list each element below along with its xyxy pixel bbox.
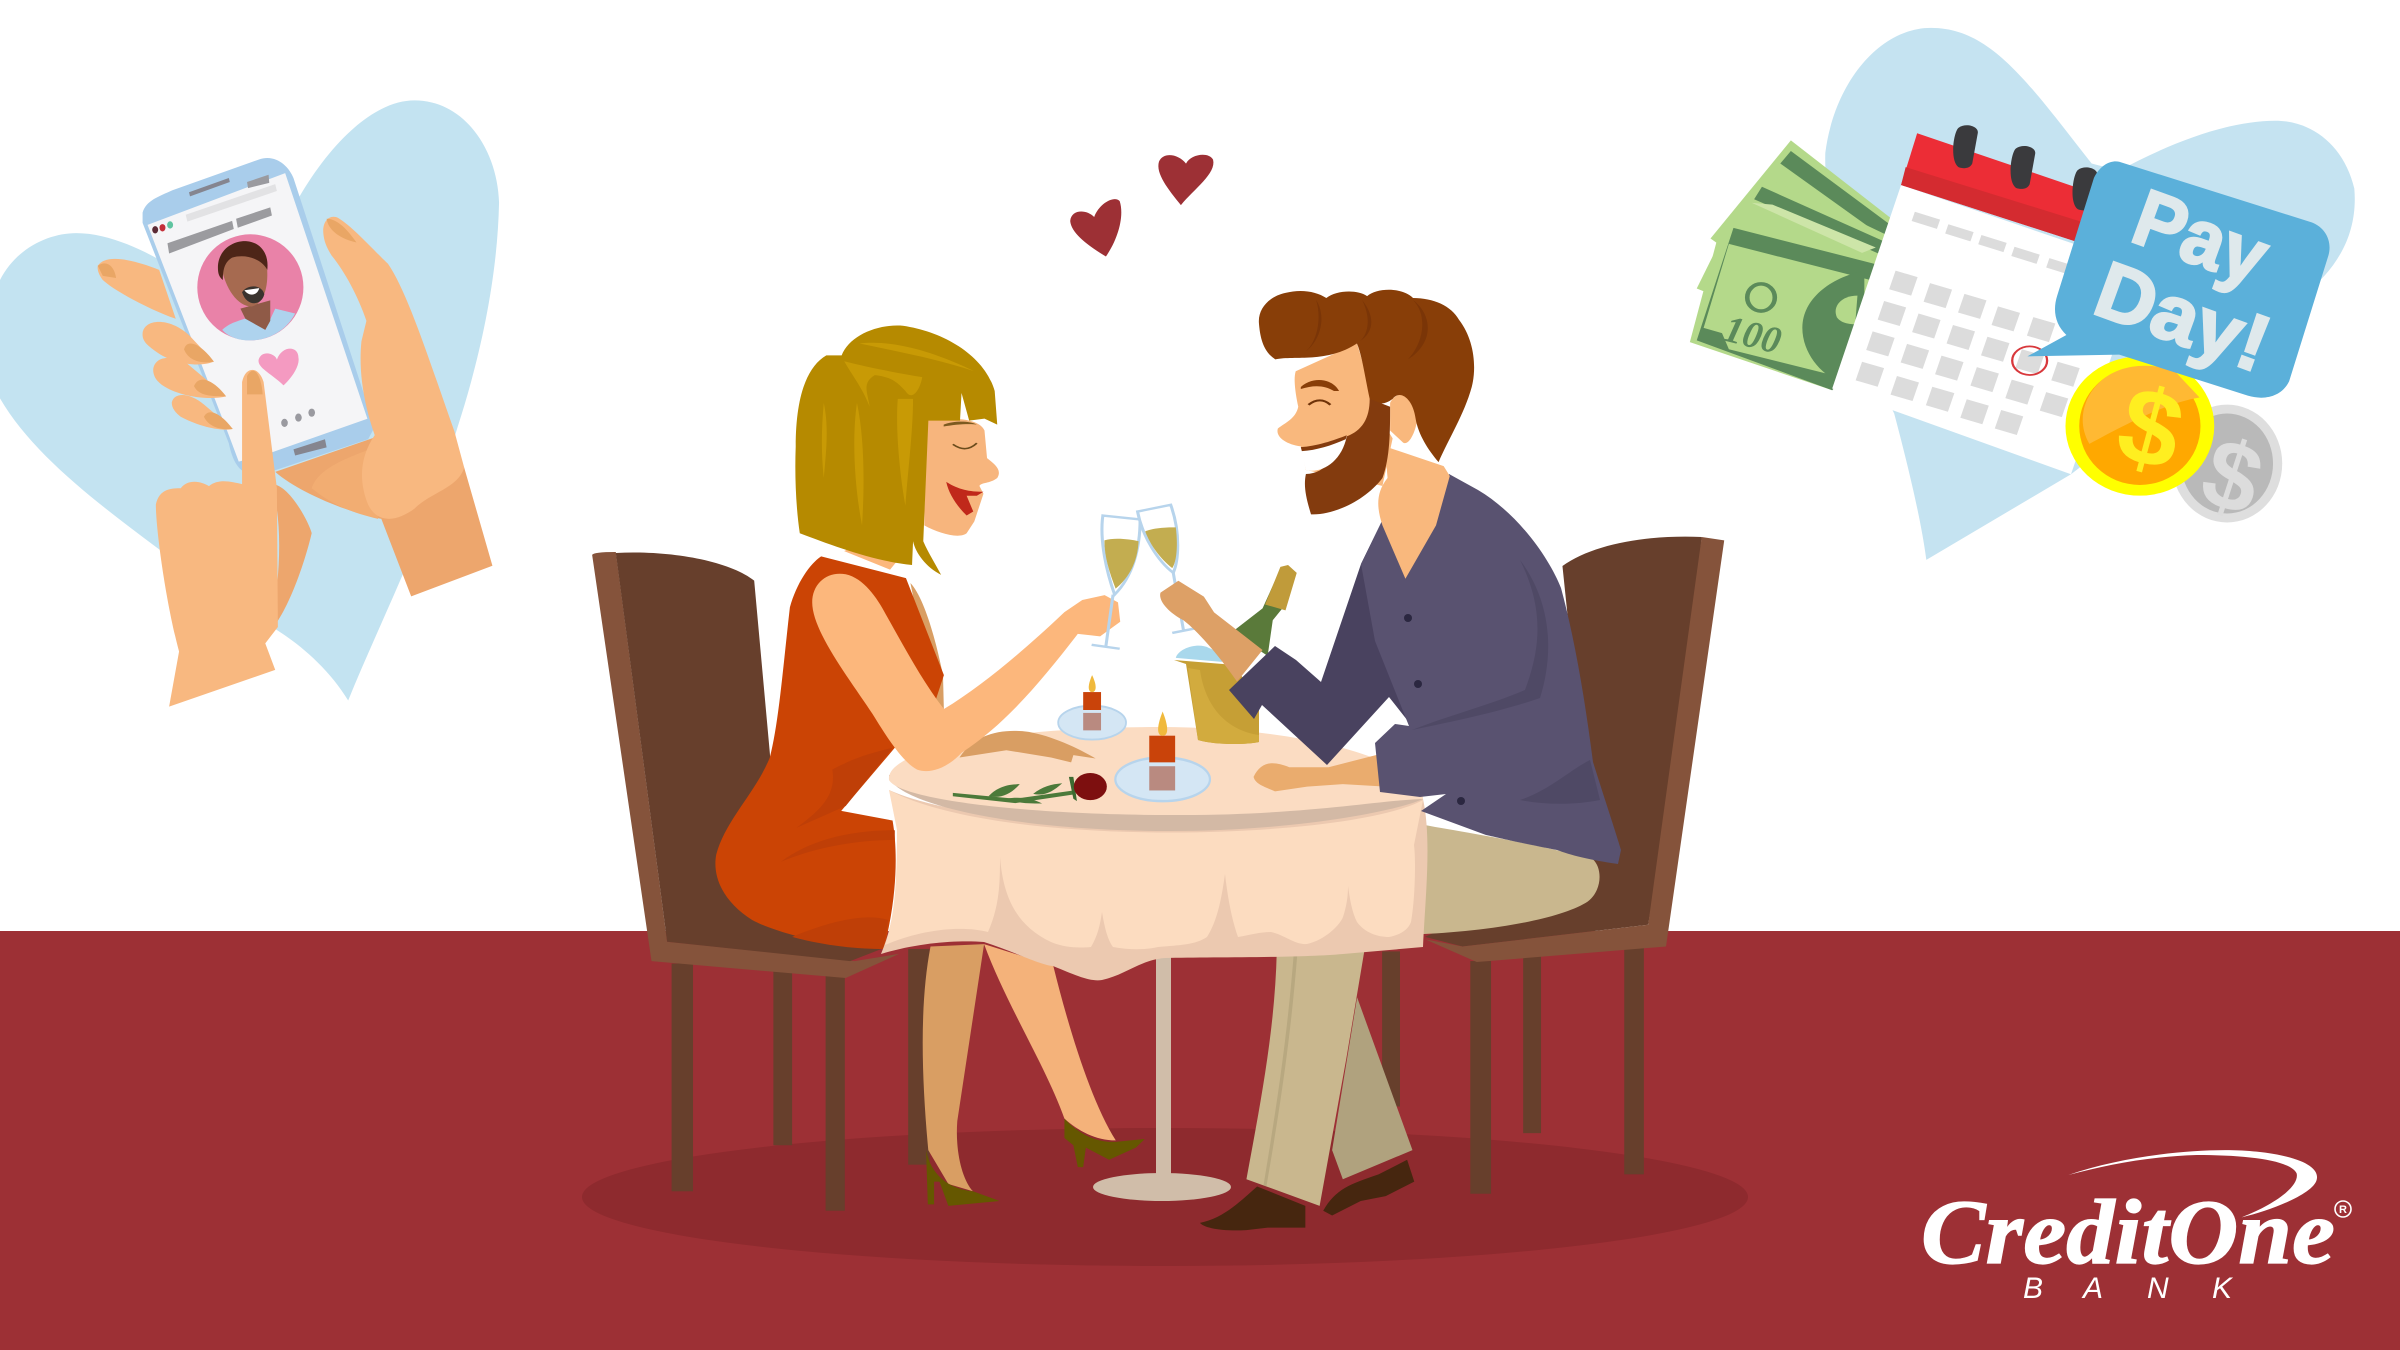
holding hand thumb [323,217,464,519]
front leg and heel [984,944,1145,1167]
left flute [1092,516,1140,649]
rose [953,773,1107,804]
front shoe [1200,1186,1305,1230]
champagne flutes [1092,505,1196,649]
right chair [1382,537,1724,1194]
champagne bottle and bucket [1174,565,1297,744]
neck [844,541,913,570]
woman head [795,326,999,575]
front candle [1115,711,1210,801]
blue heart behind calendar [1825,28,2355,560]
hearts above couple [1070,155,1213,257]
table items and woman arms [812,574,1210,804]
eye [1308,400,1330,405]
face [1277,344,1393,486]
orange dress [715,556,944,949]
shirt folds [1412,560,1600,804]
woman raised arm [812,574,1120,771]
face [924,419,999,536]
panel: phone dating app illustration [0,100,499,707]
man head [1259,290,1474,579]
gold coin [2065,356,2214,496]
thigh [1414,823,1600,934]
coin dollar signs [2106,361,2275,537]
face details [944,422,983,516]
index finger behind phone [98,259,176,319]
red floor [0,931,2400,1350]
woman resting arm [960,731,1096,762]
tablecloth [881,727,1427,980]
neck [1378,446,1450,579]
right flute [1138,505,1196,633]
back candle [1058,675,1126,740]
man hand on table [1254,753,1386,791]
table rim [889,770,1423,831]
man shirt and arms [1160,474,1621,864]
logo swoosh [2068,1150,2317,1217]
back leg [1332,997,1412,1179]
table stem and base [1093,950,1231,1201]
silver coin [2172,405,2282,522]
table top [889,727,1423,815]
logo wordmark: CreditOne [1921,1181,2335,1283]
logo registered mark [2335,1201,2351,1217]
speech bubble [2027,161,2330,398]
chest skin [910,583,944,711]
man lower body [1200,823,1600,1230]
floor shadow [582,1128,1748,1266]
bucket [1174,660,1259,744]
woman lower body [715,556,1145,1206]
stack of dollar bills [1690,140,1894,390]
moustache [1301,435,1347,451]
panel: payday illustration [1690,28,2355,560]
text: bill value 100: 100 [1720,308,1785,363]
man raised forearm [1160,581,1263,682]
coin dollar signs: $ [2106,361,2195,494]
shirt body [1361,474,1621,864]
text: Pay Day!: Day! [2084,244,2282,389]
blue heart behind phone [0,100,499,700]
smartphone [143,158,375,474]
text: Pay Day!: Pay [2122,172,2280,302]
logo registered mark: R [2339,1204,2347,1216]
avatar portrait [197,234,303,340]
curled fingers [98,219,356,430]
ear [1390,394,1418,443]
text: Pay Day! [2084,172,2282,389]
pointing hand [156,370,312,707]
bottle [1176,565,1297,662]
calendar [1832,125,2142,474]
smile [1301,436,1347,471]
man hair [1259,290,1474,462]
hair curl lines [1306,300,1428,359]
left chair [592,552,930,1211]
back leg and heel [923,944,1000,1206]
beard [1305,399,1390,514]
eyebrow [1301,380,1339,391]
hair [795,326,997,575]
logo subtitle: BANK [2023,1272,2234,1305]
front leg [1246,951,1364,1206]
dark sleeve [1229,521,1430,765]
shirt buttons [1404,550,1465,805]
logo: Credit One Bank [1921,1150,2351,1305]
back shoe [1323,1160,1414,1216]
pink heart [259,349,299,385]
coin dollar signs: $ [2190,415,2275,537]
holding hand palm [275,435,492,596]
